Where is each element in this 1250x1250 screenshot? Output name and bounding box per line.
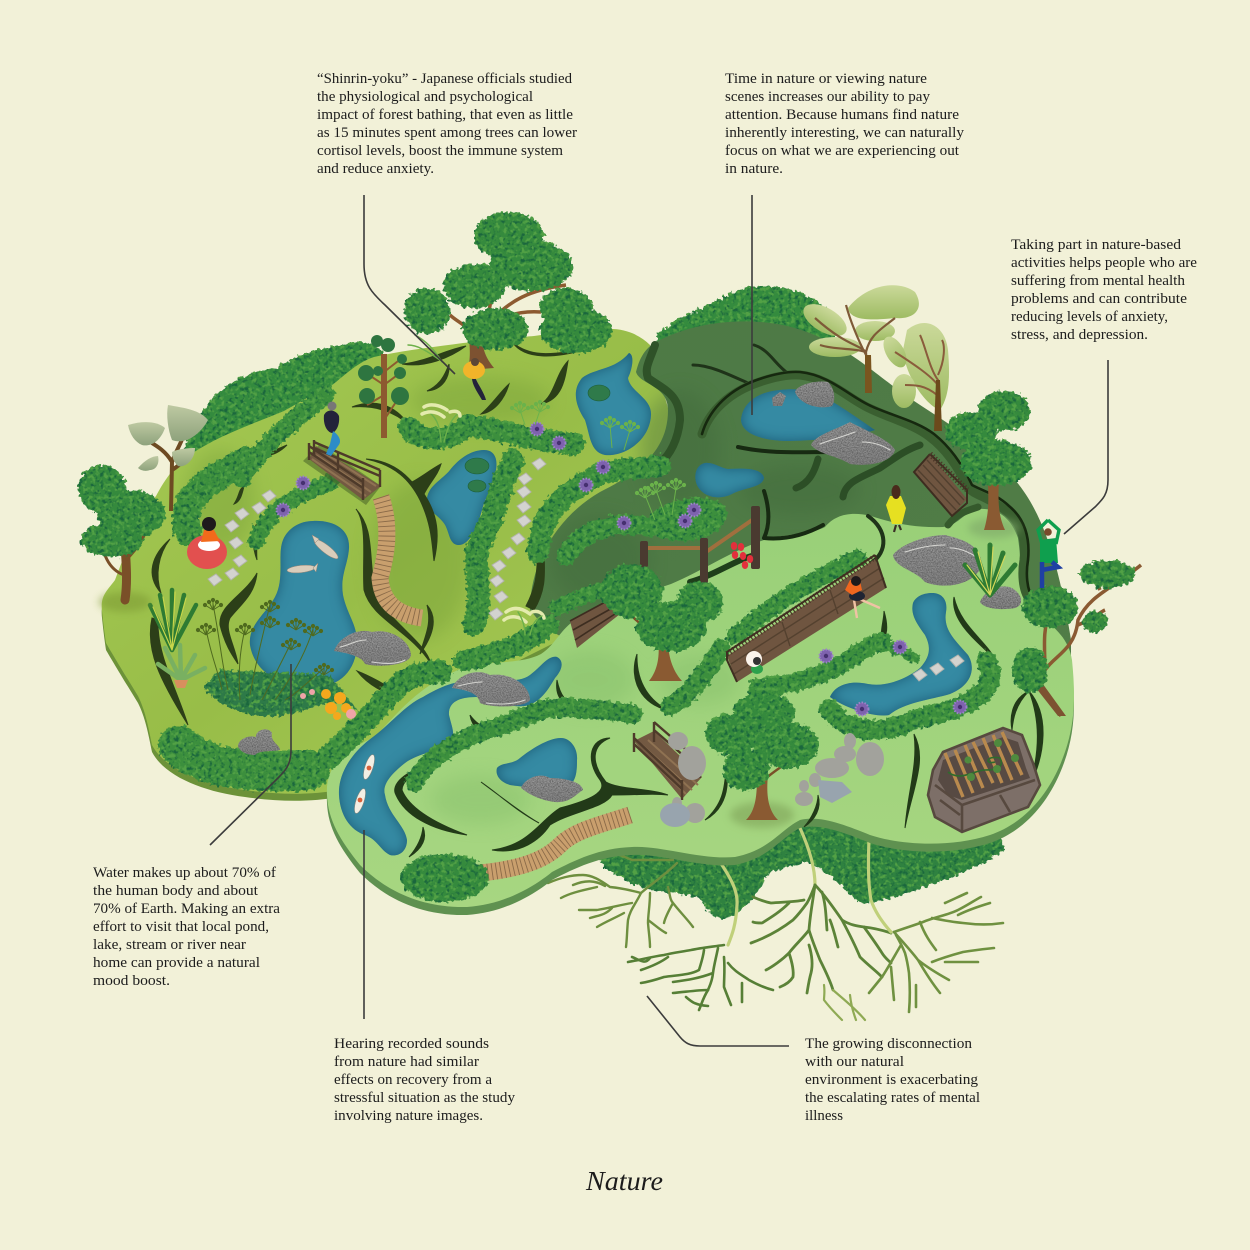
text: attention: attention. Because humans find nature	[725, 107, 959, 123]
text: water: effort to visit that local pond,	[93, 919, 269, 935]
text: attention: focus on what we are experiencing out	[725, 143, 960, 159]
tree: left green tree	[78, 465, 165, 612]
title: Nature	[585, 1166, 663, 1196]
text: nature-based activities: reducing levels of anxiety,	[1011, 309, 1168, 325]
hedge behind the dark lobe	[665, 314, 808, 345]
person seen from above	[746, 651, 763, 674]
text: disconnection: with our natural	[805, 1054, 904, 1070]
ground shading: light green lobe	[430, 650, 740, 825]
text: attention	[725, 71, 965, 177]
text: water: mood boost.	[93, 973, 170, 989]
koi fish	[287, 535, 377, 815]
text: Shinrin-yoku: and reduce anxiety.	[317, 161, 434, 177]
text: water: lake, stream or river near	[93, 937, 246, 953]
long benches	[727, 555, 886, 682]
text: disconnection	[805, 1036, 980, 1124]
crevices in yellow-green lobe	[150, 343, 584, 736]
tree: pale tree one	[798, 285, 919, 393]
text: disconnection: the escalating rates of mental	[805, 1090, 980, 1106]
tree: right green tree	[945, 391, 1032, 538]
text: recorded sounds	[334, 1036, 515, 1124]
text: disconnection: The growing disconnection	[805, 1036, 972, 1052]
person on bridge	[324, 402, 340, 456]
ornamental grasses	[408, 335, 544, 635]
text: recorded sounds: from nature had similar	[334, 1054, 479, 1070]
agave by rocks	[965, 545, 1015, 595]
text: water: 70% of Earth. Making an extra	[93, 901, 280, 917]
bridge: lower	[634, 722, 702, 800]
person in yellow top	[463, 358, 486, 400]
text: water: Water makes up about 70% of	[93, 865, 276, 881]
bridge: upper left	[303, 440, 381, 505]
text: Shinrin-yoku: cortisol levels, boost the immune system	[317, 143, 563, 159]
umbel plants by koi pond	[196, 598, 334, 700]
text: attention: Time in nature or viewing nature	[725, 71, 927, 87]
text: nature-based activities: suffering from mental health	[1011, 273, 1185, 289]
boardwalk: lower	[470, 815, 630, 874]
text: Shinrin-yoku: “Shinrin-yoku” - Japanese officials studied	[317, 71, 572, 87]
ground shading: yellow-green lobe	[185, 376, 550, 640]
text: disconnection: environment is exacerbating	[805, 1072, 979, 1088]
text: recorded sounds: involving nature images.	[334, 1108, 483, 1124]
umbel plants: light green	[510, 400, 686, 520]
text: recorded sounds: effects on recovery from a	[334, 1072, 492, 1088]
bench: dark lobe	[914, 454, 967, 516]
roots under the garden	[548, 828, 1003, 1020]
text: nature-based activities: problems and can contribute	[1011, 291, 1187, 307]
person on red cushion	[187, 517, 227, 569]
smooth boulders	[660, 732, 884, 827]
text: nature-based activities: Taking part in nature-based	[1011, 237, 1182, 253]
agave plant and potted plant	[150, 590, 205, 688]
tree: fan-leaf tree	[128, 405, 208, 511]
crevices in light green lobe	[395, 597, 1043, 857]
tree: middle tree	[601, 564, 723, 681]
text: Shinrin-yoku: impact of forest bathing, that even as little	[317, 107, 573, 123]
rocks	[238, 382, 1021, 802]
ground: dark green lobe	[530, 321, 1071, 720]
stepping stones	[208, 458, 964, 681]
pointer line: Shinrin-yoku	[364, 195, 455, 374]
text: attention: scenes increases our ability to pay	[725, 89, 930, 105]
text: Shinrin-yoku: as 15 minutes spent among trees can lower	[317, 125, 577, 141]
ground shading: dark green lobe	[550, 390, 860, 605]
pergola	[928, 728, 1040, 832]
text: nature-based activities: stress, and depression.	[1011, 327, 1148, 343]
ponds	[250, 353, 972, 855]
text: water	[93, 865, 280, 989]
hedge behind the left lobe	[208, 368, 362, 458]
tree: pine with round clusters	[358, 335, 409, 438]
text: disconnection: illness	[805, 1108, 843, 1124]
text: recorded sounds: Hearing recorded sounds	[334, 1036, 489, 1052]
person in yellow dress	[886, 485, 906, 532]
pointer line: attention	[751, 195, 753, 415]
bush over lower boardwalk	[401, 854, 489, 902]
crevices in dark green lobe	[647, 345, 1034, 600]
text: attention: in nature.	[725, 161, 783, 177]
text: nature-based activities	[1011, 237, 1197, 343]
tree: pale tree two	[879, 323, 949, 431]
boardwalk: upper	[380, 497, 422, 618]
purple flowers	[276, 422, 966, 716]
pointer line: water	[210, 664, 291, 845]
text: water: the human body and about	[93, 883, 259, 899]
text: water: home can provide a natural	[93, 955, 260, 971]
tree: branching right tree	[1012, 560, 1141, 716]
yoga person	[1038, 520, 1059, 588]
pointer line: disconnection	[647, 996, 789, 1046]
tree: bottom tree	[705, 692, 819, 828]
text: attention: inherently interesting, we can naturally	[725, 125, 965, 141]
text: Shinrin-yoku	[317, 71, 577, 177]
tree: top bonsai	[404, 212, 612, 370]
ground: yellow-green lobe	[102, 329, 680, 801]
text: Shinrin-yoku: the physiological and psychological	[317, 89, 533, 105]
flower bed	[204, 670, 358, 720]
ground: light green lobe	[327, 509, 1074, 915]
person sitting on bench	[845, 576, 880, 618]
pointer line: sounds	[363, 830, 365, 1019]
lily pads	[465, 385, 610, 492]
rock highlights	[340, 432, 975, 704]
red tulips	[731, 542, 753, 569]
hedges in the garden	[178, 395, 990, 782]
bench: left of middle tree	[570, 600, 620, 648]
text: recorded sounds: stressful situation as the study	[334, 1090, 515, 1106]
pointer line: activities	[1064, 360, 1108, 534]
hedge hanging below the garden	[588, 800, 1005, 918]
rail fence	[640, 506, 760, 583]
text: nature-based activities: activities helps people who are	[1011, 255, 1197, 271]
